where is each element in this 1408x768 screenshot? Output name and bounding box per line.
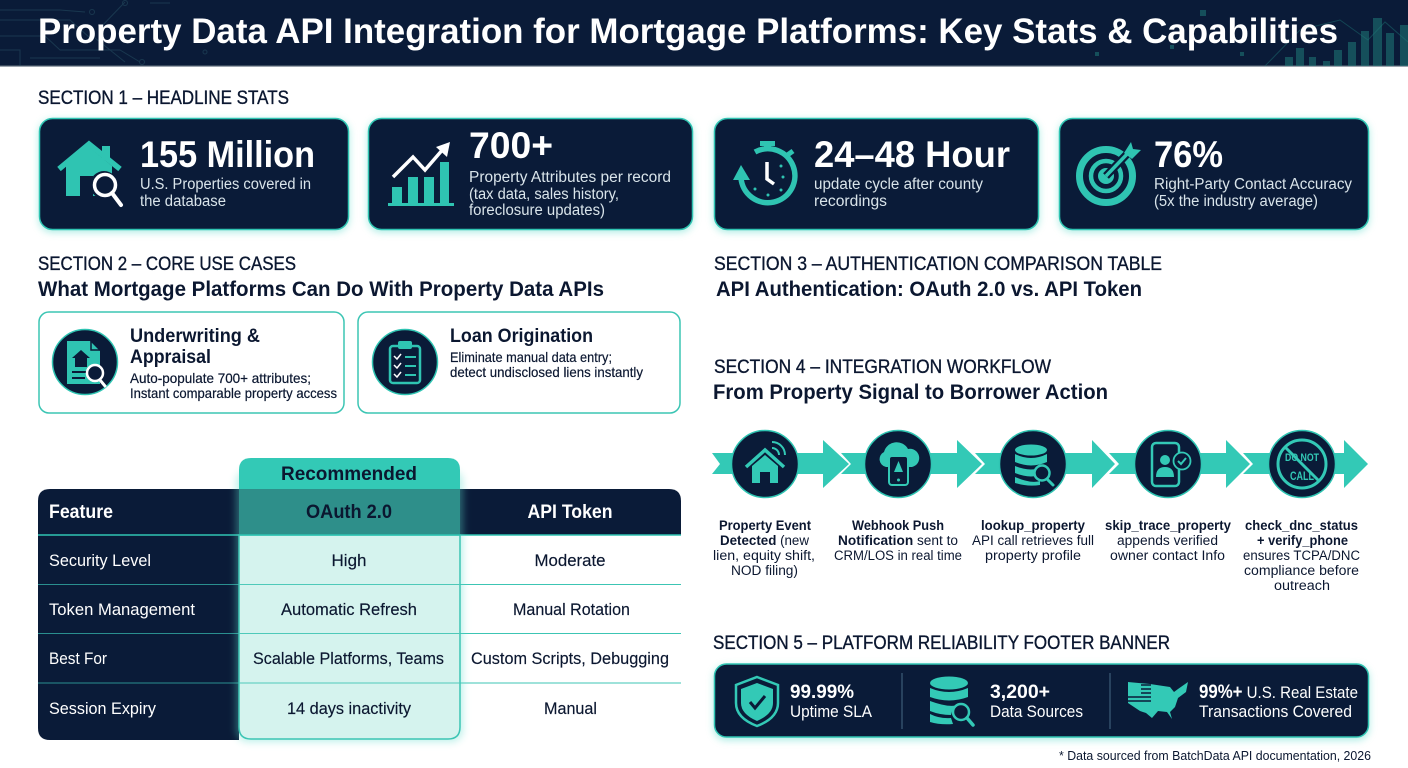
workflow step 4: skip_trace_property	[1105, 518, 1231, 533]
workflow step 5	[1243, 430, 1360, 593]
icon: do not call: DO NOT	[1285, 452, 1319, 464]
icon: house with signal	[732, 430, 798, 498]
workflow step 2	[834, 430, 962, 563]
use case card: underwriting: Appraisal	[130, 347, 211, 368]
workflow chevron arrows	[712, 440, 1368, 488]
stat card: 76%: 76%	[1154, 134, 1223, 175]
reliability item: data sources: Data Sources	[990, 702, 1083, 721]
icon: US map	[1128, 682, 1188, 719]
stat card: 155 million: 155 Million	[140, 134, 315, 175]
table column: OAuth 2.0 recommended: High	[332, 551, 366, 570]
workflow step 1: Detected (new	[720, 533, 809, 548]
reliability item: data sources: 3,200+	[990, 682, 1050, 703]
reliability item: uptime: Uptime SLA	[790, 702, 873, 721]
stat card: 700+: (tax data, sales history,	[469, 186, 619, 203]
icon: rising bar chart	[388, 142, 454, 206]
workflow step 3: lookup_property	[981, 518, 1085, 533]
stat card: 24-48 hour	[714, 118, 1039, 232]
stat card: 700+: 700+	[469, 125, 553, 166]
reliability item: transactions: Transactions Covered	[1199, 702, 1352, 721]
table column: OAuth 2.0 recommended: Scalable Platforms, Teams	[253, 649, 444, 668]
workflow step 5: + verify_phone	[1257, 533, 1348, 548]
reliability item: data sources	[930, 676, 1083, 725]
subheading: section 3: API Authentication: OAuth 2.0 vs. API Token	[716, 278, 1142, 301]
workflow step 2: Webhook Push	[852, 518, 944, 533]
icon: cloud and phone	[864, 430, 932, 498]
footnote: * Data sourced from BatchData API documentation, 2026	[1059, 748, 1371, 763]
workflow step 1: lien, equity shift,	[713, 548, 815, 563]
table column: API token: Custom Scripts, Debugging	[471, 649, 669, 668]
icon: stopwatch	[733, 141, 795, 203]
table column: API token	[460, 489, 681, 718]
reliability item: uptime	[736, 677, 873, 726]
workflow step 2: Notification sent to	[838, 533, 958, 548]
heading: section 2: SECTION 2 – CORE USE CASES	[38, 254, 296, 275]
title: Property Data API Integration for Mortgage Platforms: Key Stats & Capabilities	[38, 12, 1338, 51]
stat card: 700+: Property Attributes per record	[469, 169, 671, 186]
stat card: 76%	[1059, 118, 1369, 232]
icon: phone with verified contact	[1134, 430, 1202, 498]
workflow step 5: compliance before	[1244, 563, 1359, 578]
table column: OAuth 2.0 recommended: 14 days inactivity	[287, 699, 411, 718]
reliability item: transactions	[1128, 682, 1358, 721]
workflow step 4	[1105, 430, 1231, 563]
table column: feature: Best For	[49, 649, 107, 668]
use case card: loan origination: Loan Origination	[450, 326, 593, 347]
reliability item: transactions: 99%+ U.S. Real Estate	[1199, 682, 1358, 703]
workflow step 4: owner contact Info	[1110, 548, 1225, 563]
stat card: 155 million: the database	[140, 193, 226, 210]
workflow step 4: appends verified	[1117, 533, 1218, 548]
table column: API token: Moderate	[534, 551, 606, 570]
stat card: 155 million: U.S. Properties covered in	[140, 176, 311, 193]
icon: house with magnifier	[59, 144, 121, 205]
use case card: underwriting: Instant comparable property access	[130, 385, 337, 401]
icon: clipboard checklist	[372, 330, 438, 394]
header banner	[0, 0, 1408, 66]
table column: API token: Manual	[544, 699, 597, 718]
subheading: section 2: What Mortgage Platforms Can Do With Property Data APIs	[38, 278, 604, 301]
workflow step 1	[713, 430, 815, 578]
workflow step 5: outreach	[1274, 578, 1330, 593]
use case card: loan origination	[358, 312, 680, 413]
table column: OAuth 2.0 recommended: OAuth 2.0	[306, 502, 392, 523]
workflow step 2: CRM/LOS in real time	[834, 548, 962, 563]
stat card: 155 million	[39, 118, 349, 232]
heading: section 3: SECTION 3 – AUTHENTICATION COMPARISON TABLE	[714, 254, 1162, 275]
stat card: 24-48 hour: recordings	[814, 193, 887, 210]
heading: section 5: SECTION 5 – PLATFORM RELIABILITY FOOTER BANNER	[713, 633, 1170, 654]
table column: feature: Token Management	[49, 600, 195, 619]
stat card: 700+: foreclosure updates)	[469, 202, 605, 219]
icon: target with dart	[1080, 142, 1141, 202]
subheading: section 4: From Property Signal to Borrower Action	[713, 381, 1108, 404]
use case card: underwriting: Underwriting &	[130, 326, 260, 347]
workflow step 3: API call retrieves full	[972, 533, 1094, 548]
table column: API token: Manual Rotation	[513, 600, 630, 619]
workflow step 3	[972, 430, 1094, 563]
workflow step 1: Property Event	[719, 518, 811, 533]
stat card: 76%: (5x the industry average)	[1154, 193, 1318, 210]
table column: feature: Security Level	[49, 551, 151, 570]
table column: OAuth 2.0 recommended: Automatic Refresh	[281, 600, 417, 619]
workflow step 1: NOD filing)	[731, 563, 798, 578]
stat card: 24-48 hour: 24–48 Hour	[814, 134, 1010, 175]
icon: database search	[1000, 430, 1066, 498]
heading: section 1: SECTION 1 – HEADLINE STATS	[38, 88, 289, 109]
workflow step 5: ensures TCPA/DNC	[1243, 548, 1360, 563]
table column: OAuth 2.0 recommended	[236, 458, 463, 742]
table column: feature: Session Expiry	[49, 699, 156, 718]
comparison table	[38, 458, 681, 742]
icon: do not call: CALL	[1290, 469, 1314, 483]
icon: database search	[930, 676, 973, 725]
use case card: underwriting: Auto-populate 700+ attributes;	[130, 370, 311, 386]
stat card: 24-48 hour: update cycle after county	[814, 176, 983, 193]
table column: feature	[38, 489, 239, 740]
use case card: loan origination: detect undisclosed liens instantly	[450, 364, 643, 380]
use case card: underwriting	[39, 312, 344, 413]
icon: shield	[736, 677, 778, 726]
footer banner	[714, 664, 1369, 740]
reliability item: uptime: 99.99%	[790, 682, 854, 703]
workflow step 5: check_dnc_status	[1245, 518, 1358, 533]
workflow step 3: property profile	[985, 548, 1081, 563]
icon: property document	[52, 330, 118, 394]
heading: section 4: SECTION 4 – INTEGRATION WORKFLOW	[714, 357, 1051, 378]
stat card: 700+	[368, 118, 693, 232]
stat card: 76%: Right-Party Contact Accuracy	[1154, 176, 1352, 193]
table column: API token: API Token	[528, 502, 612, 523]
icon: do not call	[1268, 430, 1336, 498]
badge: recommended: Recommended	[281, 464, 417, 485]
table column: feature: Feature	[49, 502, 113, 523]
use case card: loan origination: Eliminate manual data entry;	[450, 349, 612, 365]
